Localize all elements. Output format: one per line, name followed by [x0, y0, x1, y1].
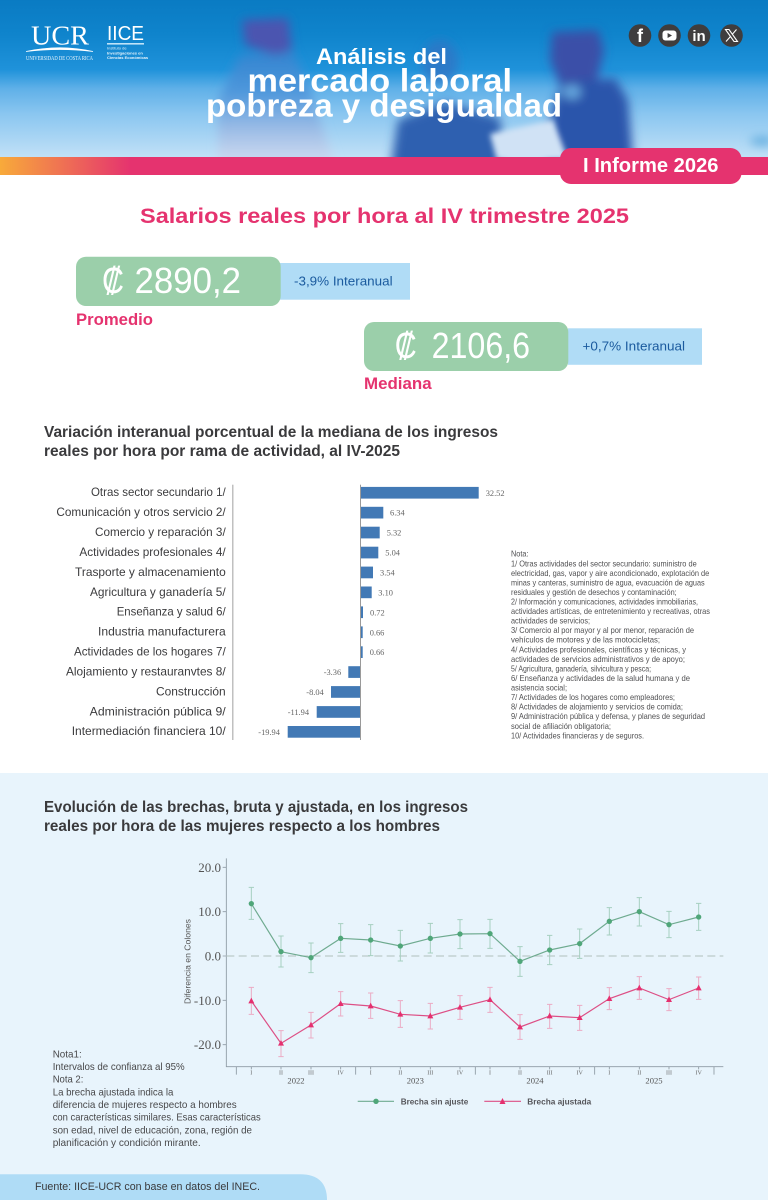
title: pobreza y desigualdad: [206, 88, 562, 124]
notes: chart: Intervalos de confianza al 95%: [53, 1062, 185, 1073]
heading: salarios: Salarios reales por hora al IV trimestre 2025: [140, 205, 629, 228]
x axis labels: IV: [577, 1070, 584, 1076]
notes: actividades: 2/ Información y comunicaciones, actividades inmobiliarias,: [511, 598, 698, 606]
heading: brechas: [44, 799, 468, 835]
category labels: Otras sector secundario 1/: [91, 485, 226, 499]
title: [206, 44, 562, 124]
icon: linkedin: in: [692, 28, 706, 45]
series: brecha ajustada: [248, 977, 702, 1057]
notes: actividades: 3/ Comercio al por mayor y al por menor, reparación de: [511, 626, 694, 635]
panel: promedio: 2890,2: [134, 260, 241, 301]
category labels: Comercio y reparación 3/: [95, 525, 226, 539]
value labels: 6.34: [390, 509, 405, 518]
category labels: Administración pública 9/: [90, 704, 226, 718]
x axis labels: III: [427, 1070, 433, 1076]
notes: actividades: actividades de servicios;: [511, 617, 590, 626]
plot: [223, 858, 723, 1075]
logo: IICE: Instituto de: [107, 46, 127, 50]
notes: chart: [53, 1049, 261, 1149]
pink stripe: [0, 157, 768, 175]
category labels: Industria manufacturera: [98, 625, 226, 639]
notes: actividades: 4/ Actividades profesionales, científicas y técnicas, y: [511, 645, 687, 654]
value labels: -11.94: [288, 708, 310, 717]
x axis labels: IV: [338, 1070, 345, 1076]
notes: actividades: asistencia social;: [511, 684, 567, 692]
x axis labels: I: [489, 1070, 491, 1076]
legend: Brecha sin ajuste: [401, 1096, 469, 1106]
x axis labels: III: [547, 1070, 553, 1076]
legend: Brecha ajustada: [527, 1096, 591, 1106]
x axis labels: III: [308, 1070, 314, 1076]
notes: actividades: social de afiliación obligatoria;: [511, 722, 611, 731]
logo: IICE: Investigaciones en: [107, 50, 143, 55]
notes: actividades: minas y canteras, suministro de agua, evacuación de aguas: [511, 578, 705, 587]
footer: fuente: Fuente: IICE-UCR con base en datos del INEC.: [35, 1181, 260, 1193]
panel: mediana: 2106,6: [432, 325, 530, 366]
x axis labels: I: [370, 1070, 372, 1076]
social icons: [629, 24, 743, 47]
x axis labels: I: [608, 1070, 610, 1076]
y axis labels: -10.0: [194, 993, 221, 1008]
heading: variacion interanual: Variación interanual porcentual de la mediana de los ingresos: [44, 424, 498, 441]
category labels: Agricultura y ganadería 5/: [90, 585, 226, 599]
notes: actividades: 9/ Administración pública y defensa, y planes de seguridad: [511, 712, 705, 721]
legend: [358, 1096, 591, 1106]
notes: actividades: Nota:: [511, 550, 528, 559]
heading: brechas: Evolución de las brechas, bruta y ajustada, en los ingresos: [44, 799, 468, 816]
logo: IICE: IICE: [107, 23, 144, 45]
bars: [288, 487, 479, 738]
footer: fuente: [0, 1174, 327, 1200]
y axis labels: 0.0: [205, 948, 221, 964]
notes: actividades: 1/ Otras actividades del sector secundario: suministro de: [511, 559, 697, 568]
category labels: Alojamiento y restauranvtes 8/: [66, 664, 226, 678]
logo: UCR: UCR: [31, 20, 89, 50]
series: brecha sin ajuste: [249, 887, 701, 976]
x axis labels: II: [279, 1070, 283, 1076]
x axis labels: IV: [457, 1070, 464, 1076]
notes: actividades: 8/ Actividades de alojamiento y servicios de comida;: [511, 703, 683, 712]
category labels: Actividades profesionales 4/: [79, 545, 226, 559]
notes: chart: Nota 2:: [53, 1075, 83, 1086]
heading: variacion interanual: [44, 424, 498, 460]
logo: UCR: UNIVERSIDAD DE COSTA RICA: [26, 55, 93, 62]
icon: facebook: f: [637, 26, 644, 46]
x axis labels: 2023: [407, 1076, 424, 1086]
value labels: [258, 489, 505, 737]
value labels: -3.36: [324, 668, 341, 677]
category labels: [56, 485, 226, 738]
title: Análisis del: [316, 44, 447, 69]
notes: actividades: actividades de servicios administrativos y de apoyo;: [511, 655, 685, 664]
x axis labels: II: [398, 1070, 402, 1076]
notes: chart: Nota1:: [53, 1049, 82, 1060]
x axis labels: IV: [696, 1070, 703, 1076]
notes: actividades: vehículos de motores y de las motocicletas;: [511, 636, 660, 645]
y axis labels: -20.0: [194, 1037, 221, 1052]
icon: youtube: [658, 24, 681, 47]
panel: promedio: ₡: [102, 260, 124, 301]
report badge: I Informe 2026: [583, 155, 718, 177]
value labels: -8.04: [306, 688, 325, 697]
bar chart: rama de actividad: [56, 485, 505, 740]
x axis labels: III: [666, 1070, 672, 1076]
value labels: 32.52: [486, 489, 505, 498]
title: mercado laboral: [248, 62, 512, 98]
x axis labels: II: [637, 1070, 641, 1076]
value labels: 3.10: [378, 588, 393, 597]
x axis labels: 2022: [287, 1076, 305, 1086]
x axis labels: [250, 1070, 703, 1086]
notes: actividades: residuales y gestión de desechos y contaminación;: [511, 588, 677, 597]
notes: chart: planificación y condición mirante.: [53, 1138, 201, 1149]
notes: actividades: actividades artísticas, de entretenimiento y recreativas, otras: [511, 607, 710, 616]
value labels: 0.66: [370, 648, 384, 657]
notes: actividades: 10/ Actividades financieras y de seguros.: [511, 731, 644, 740]
category labels: Intermediación financiera 10/: [72, 724, 226, 738]
y axis labels: 10.0: [198, 904, 221, 919]
panel: mediana: +0,7% Interanual: [582, 339, 685, 354]
category labels: Enseñanza y salud 6/: [117, 605, 226, 619]
panel: mediana: [364, 322, 702, 393]
logo: IICE: [107, 23, 149, 60]
panel: mediana: ₡: [395, 325, 417, 366]
notes: chart: son edad, nivel de educación, zona, región de: [53, 1125, 252, 1136]
x axis labels: 2024: [526, 1076, 544, 1086]
category labels: Actividades de los hogares 7/: [74, 644, 226, 658]
notes: chart: diferencia de mujeres respecto a hombres: [53, 1100, 237, 1111]
panel: mediana: Mediana: [364, 375, 432, 393]
y axis labels: 20.0: [198, 860, 221, 875]
x axis labels: I: [250, 1070, 252, 1076]
logo: IICE: Ciencias Económicas: [107, 55, 149, 60]
x axis labels: 2025: [645, 1076, 663, 1086]
category labels: Trasporte y almacenamiento: [75, 565, 226, 579]
category labels: Construcción: [156, 684, 226, 698]
notes: chart: La brecha ajustada indica la: [53, 1087, 174, 1098]
panel: promedio: -3,9% Interanual: [294, 274, 393, 289]
value labels: 0.72: [370, 608, 385, 617]
header banner: blurred business people photo: [0, 0, 768, 170]
panel: promedio: [76, 257, 410, 329]
notes: actividades: electricidad, gas, vapor y aire acondicionado, explotación de: [511, 569, 710, 578]
y axis labels: [194, 860, 221, 1052]
notes: chart: con características similares. Esas características: [53, 1113, 261, 1124]
value labels: -19.94: [258, 728, 281, 737]
value labels: 0.66: [370, 628, 384, 637]
value labels: 5.04: [385, 549, 401, 558]
report badge: [560, 148, 742, 184]
notes: actividades: 7/ Actividades de los hogares como empleadores;: [511, 693, 675, 702]
line chart: brechas: [182, 858, 723, 1106]
heading: variacion interanual: reales por hora por rama de actividad, al IV-2025: [44, 443, 400, 460]
icon: X: [720, 24, 743, 47]
category labels: Comunicación y otros servicio 2/: [56, 505, 226, 519]
notes: actividades: [511, 550, 710, 740]
logo: UCR: [26, 20, 93, 62]
value labels: 3.54: [380, 568, 395, 578]
heading: brechas: reales por hora de las mujeres respecto a los hombres: [44, 818, 440, 835]
value labels: 5.32: [387, 529, 401, 538]
panel: promedio: Promedio: [76, 311, 153, 329]
notes: actividades: 5/ Agricultura, ganadería, silvicultura y pesca;: [511, 664, 651, 673]
x axis labels: II: [518, 1070, 522, 1076]
y axis title: Diferencia en Colones: [182, 919, 192, 1004]
panel: brechas background: [0, 773, 768, 1200]
notes: actividades: 6/ Enseñanza y actividades de la salud humana y de: [511, 674, 690, 683]
